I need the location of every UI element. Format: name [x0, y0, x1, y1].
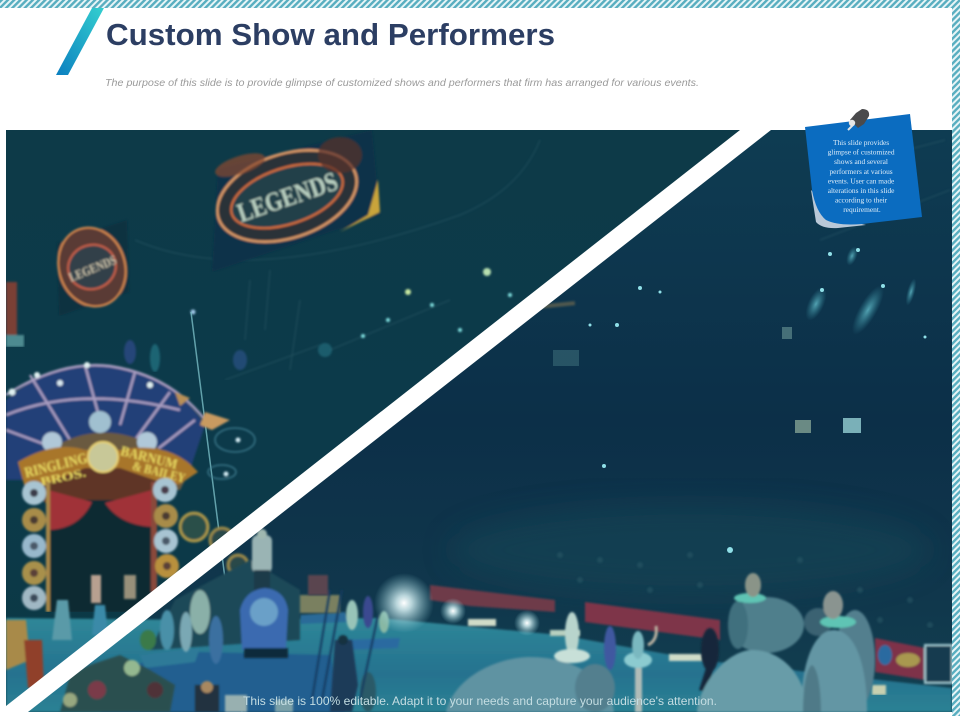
note text: requirement. — [843, 205, 881, 214]
subtitle: The purpose of this slide is to provide glimpse of customized shows and performers that firm has arranged for various events. — [105, 77, 699, 89]
title accent slash — [56, 8, 104, 75]
ceiling lights upper left — [124, 268, 575, 372]
rider: back right — [823, 591, 843, 619]
elephant: back left — [742, 596, 806, 654]
note paper — [805, 114, 922, 224]
performers and float right of band — [60, 529, 300, 712]
title: Custom Show and Performers — [106, 17, 555, 52]
note text: performers at various — [829, 167, 893, 176]
note text: glimpse of customized — [828, 148, 895, 157]
gold scrollwork — [180, 513, 208, 541]
arena floor — [6, 612, 952, 712]
sign: small Legends — [56, 222, 129, 314]
doorway — [50, 500, 151, 612]
arch pillars — [46, 482, 50, 612]
note text: according to their — [835, 196, 888, 205]
arch inner — [60, 431, 185, 492]
ceiling spotlights right — [553, 245, 926, 553]
performers left of band — [6, 575, 136, 688]
rider: back left — [745, 573, 761, 597]
light pole — [191, 312, 242, 712]
rider: centre — [565, 612, 579, 656]
sign: small Legends: LEGENDS — [67, 252, 119, 285]
circus arch: & BAILEY — [131, 458, 188, 486]
pillar medallions — [22, 481, 46, 505]
sign: Legends: LEGENDS — [233, 166, 341, 228]
sticky note — [805, 109, 922, 228]
banner — [18, 447, 198, 490]
elephant: back right — [838, 609, 876, 700]
elephant: right — [801, 630, 867, 712]
right hatched border — [952, 0, 960, 716]
note text: alterations in this slide — [828, 186, 895, 195]
crowd — [557, 552, 933, 628]
sign: Legends — [206, 130, 380, 272]
sign: left edge — [6, 282, 24, 347]
foreground crowd — [60, 655, 175, 712]
elephant: centre — [446, 657, 614, 712]
note curl — [811, 190, 866, 228]
circus arch: BROS. — [39, 465, 87, 489]
note text: shows and several — [834, 157, 888, 166]
pin — [848, 109, 869, 130]
photo: circus arena — [6, 130, 952, 712]
arch dome — [6, 364, 205, 480]
white diagonal band — [6, 130, 771, 712]
ceiling rigging — [290, 353, 294, 357]
curtains — [48, 490, 92, 530]
note text: This slide provides — [833, 138, 889, 147]
circus arch — [6, 362, 255, 612]
elephant: front — [697, 650, 807, 712]
circus arch: BARNUM — [119, 444, 179, 473]
note text: events. User can made — [828, 176, 895, 185]
footer text: This slide is 100% editable. Adapt it to your needs and capture your audience's attention. — [243, 694, 717, 708]
elephants and riders — [446, 573, 875, 712]
central performers — [308, 575, 389, 712]
swirl decoration — [208, 428, 255, 479]
arena background — [6, 130, 952, 712]
circus arch: RINGLING — [23, 451, 89, 482]
handler — [701, 628, 719, 672]
top hatched border — [0, 0, 960, 8]
arena barrier banners — [290, 585, 952, 695]
glowing ring lights — [374, 573, 540, 636]
